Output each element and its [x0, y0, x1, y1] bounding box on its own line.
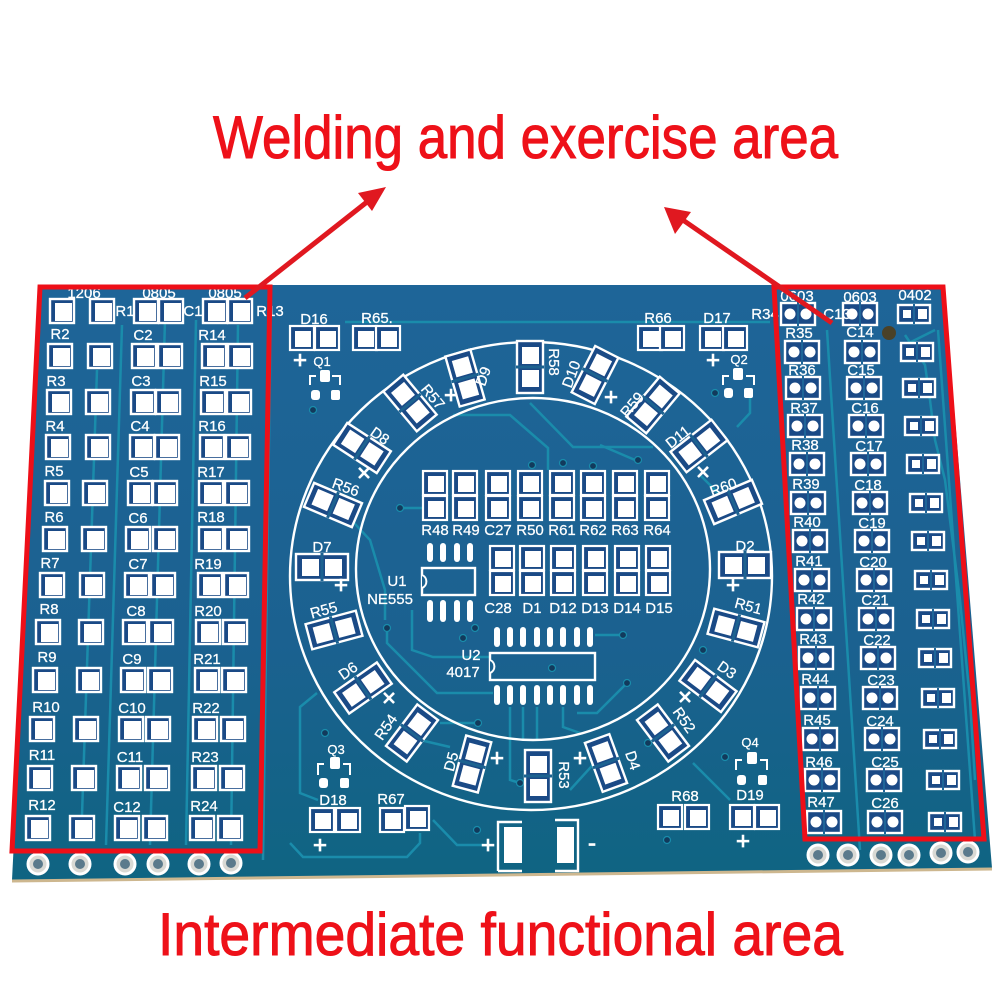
- battery pads: -: [588, 830, 596, 857]
- ring component labels: +: [573, 745, 587, 772]
- chip U1 NE555: U1: [387, 573, 407, 590]
- left practice labels: C6: [128, 510, 148, 527]
- lower capacitor and diode grid: D15: [645, 600, 673, 617]
- left practice labels: R10: [32, 699, 60, 716]
- right practice labels: R38: [791, 437, 819, 454]
- ring component labels: +: [490, 745, 504, 772]
- mounting hole: [882, 326, 896, 340]
- ring circles: [290, 342, 772, 810]
- corner components bottom: [310, 735, 779, 859]
- ring component labels: +: [604, 384, 618, 411]
- right practice labels: C15: [847, 362, 875, 379]
- left practice labels: 0805: [208, 285, 242, 302]
- left practice labels: R12: [28, 797, 56, 814]
- left practice labels: R11: [29, 747, 55, 764]
- left practice labels: R23: [191, 749, 219, 766]
- ring component labels: R51: [733, 595, 764, 618]
- ring component labels: R60: [708, 475, 739, 500]
- right practice labels: R45: [803, 712, 831, 729]
- right practice labels: R43: [799, 631, 827, 648]
- left practice labels: R6: [44, 509, 64, 526]
- caption: intermediate functional area: Intermediate functional area: [158, 901, 844, 968]
- right practice labels: 0603: [780, 288, 814, 305]
- left practice labels: C10: [118, 700, 146, 717]
- top resistor grid: R48: [421, 522, 449, 539]
- left practice labels: R20: [194, 603, 222, 620]
- copper traces: [82, 300, 975, 860]
- left practice labels: C9: [122, 651, 142, 668]
- ring component labels: R52: [669, 704, 699, 737]
- ring component labels: R53: [555, 761, 572, 789]
- top resistor grid: R49: [452, 522, 480, 539]
- ring component labels: D11: [663, 423, 694, 452]
- ring components: [296, 341, 771, 802]
- ring component labels: D7: [312, 539, 332, 556]
- left practice labels: C3: [131, 373, 151, 390]
- ring component labels: R59: [617, 389, 648, 421]
- lower capacitor and diode grid: D12: [549, 600, 577, 617]
- top resistor grid: R61: [548, 522, 576, 539]
- ring component labels: R57: [417, 381, 448, 413]
- corner components bottom: Q4: [741, 735, 759, 750]
- left practice labels: R17: [197, 464, 225, 481]
- left practice labels: R8: [39, 601, 59, 618]
- left practice labels: R19: [194, 556, 222, 573]
- right practice labels: C25: [871, 754, 899, 771]
- right practice labels: R39: [792, 476, 820, 493]
- right practice labels: R42: [797, 591, 825, 608]
- corner components top: Q2: [730, 352, 748, 367]
- lower capacitor and diode grid: [484, 546, 673, 617]
- battery pads: +: [481, 832, 495, 859]
- left practice labels: R16: [198, 418, 226, 435]
- ring component labels: +: [444, 382, 458, 409]
- left practice labels: R1: [115, 303, 135, 320]
- left practice labels: R14: [198, 327, 226, 344]
- left practice labels: C11: [117, 749, 143, 766]
- corner components bottom: Q3: [327, 742, 345, 757]
- ring component labels: R58: [545, 348, 562, 376]
- right practice labels: [751, 287, 932, 812]
- corner components top: Q1: [313, 354, 331, 369]
- left practice labels: R13: [256, 303, 284, 320]
- left practice labels: R21: [193, 651, 221, 668]
- right practice labels: C24: [866, 713, 894, 730]
- corner components top: [290, 310, 754, 400]
- ring component labels: +: [726, 572, 740, 599]
- left practice labels: R2: [50, 326, 70, 343]
- right practice pads: [781, 302, 961, 834]
- right practice labels: C13: [823, 306, 851, 323]
- right practice labels: R46: [805, 754, 833, 771]
- corner components top: R65.: [361, 310, 393, 327]
- right practice labels: R37: [790, 400, 818, 417]
- arrow: right box to title: [664, 207, 832, 323]
- ring component labels: D3: [714, 658, 739, 683]
- right practice labels: 0603: [843, 289, 877, 306]
- chip U2 4017: U2: [461, 647, 481, 664]
- corner components bottom: R67: [377, 791, 405, 808]
- left practice labels: C1: [183, 303, 203, 320]
- corner components top: +: [706, 347, 720, 374]
- ring component labels: ×: [696, 459, 710, 486]
- right practice labels: C14: [846, 324, 874, 341]
- ring component labels: R56: [330, 475, 361, 500]
- corner components top: R66: [644, 310, 672, 327]
- left practice labels: R5: [44, 463, 64, 480]
- ring component labels: D5: [441, 750, 462, 773]
- left practice labels: C2: [133, 327, 153, 344]
- ring component labels: [308, 348, 764, 789]
- left practice pads: [26, 299, 252, 840]
- left practice labels: R18: [197, 509, 225, 526]
- ring component labels: D8: [367, 424, 392, 449]
- right practice labels: C23: [867, 672, 895, 689]
- right practice labels: C17: [855, 438, 883, 455]
- left practice labels: 1206: [67, 285, 101, 302]
- right practice labels: R34: [751, 306, 779, 323]
- arrow: left box to title: [245, 187, 386, 298]
- top resistor grid: R50: [516, 522, 544, 539]
- ring component labels: ×: [678, 684, 692, 711]
- top resistor grid: C27: [484, 522, 512, 539]
- ring component labels: D10: [559, 359, 584, 390]
- right practice labels: C18: [854, 477, 882, 494]
- vias: [310, 390, 728, 844]
- right practice labels: R44: [801, 671, 829, 688]
- chip U2 4017: 4017: [446, 664, 480, 681]
- left practice labels: [28, 285, 284, 816]
- red box: left practice area: [12, 287, 270, 851]
- corner components top: D16: [300, 311, 328, 328]
- chip U1 NE555: [367, 543, 475, 622]
- right practice labels: C19: [858, 515, 886, 532]
- left practice labels: C4: [130, 418, 150, 435]
- ring component labels: R55: [308, 599, 339, 622]
- lower capacitor and diode grid: D13: [581, 600, 609, 617]
- left practice labels: C5: [129, 464, 149, 481]
- left practice labels: R22: [192, 700, 220, 717]
- corner components bottom: R68: [671, 788, 699, 805]
- through holes: [28, 842, 978, 874]
- ring component labels: D6: [336, 659, 361, 684]
- left practice labels: C7: [128, 556, 148, 573]
- ring component labels: ×: [357, 460, 371, 487]
- lower capacitor and diode grid: D1: [522, 600, 542, 617]
- left practice labels: C8: [126, 603, 146, 620]
- title: welding and exercise area: Welding and exercise area: [213, 104, 839, 171]
- corner components top: +: [293, 347, 307, 374]
- right practice labels: R40: [793, 514, 821, 531]
- left practice labels: C12: [113, 799, 141, 816]
- PCB board: [12, 285, 992, 881]
- left practice labels: R24: [190, 798, 218, 815]
- corner components top: D17: [703, 310, 731, 327]
- top resistor grid: R64: [643, 522, 671, 539]
- red box: right practice area: [774, 287, 984, 839]
- chip U1 NE555: NE555: [367, 591, 413, 608]
- ring component labels: D4: [621, 749, 643, 772]
- right practice labels: C16: [851, 400, 879, 417]
- top resistor grid: R63: [611, 522, 639, 539]
- right practice labels: R47: [807, 794, 835, 811]
- top resistor grid: [421, 471, 671, 539]
- ring component labels: R54: [371, 711, 401, 744]
- ring component labels: D9: [473, 365, 495, 388]
- ring component labels: ×: [382, 685, 396, 712]
- left practice labels: R3: [46, 373, 66, 390]
- battery pads: [481, 820, 596, 871]
- corner components bottom: +: [736, 828, 750, 855]
- corner components bottom: D18: [319, 792, 347, 809]
- right practice labels: R41: [795, 553, 823, 570]
- left practice labels: R4: [45, 418, 65, 435]
- ring component labels: +: [334, 572, 348, 599]
- right practice labels: 0402: [898, 287, 932, 304]
- lower capacitor and diode grid: C28: [484, 600, 512, 617]
- top resistor grid: R62: [579, 522, 607, 539]
- corner components bottom: D19: [736, 787, 764, 804]
- left practice labels: R15: [199, 373, 227, 390]
- right practice labels: R36: [788, 362, 816, 379]
- right practice labels: C20: [859, 554, 887, 571]
- right practice labels: C21: [861, 592, 889, 609]
- ring component labels: D2: [735, 538, 755, 555]
- left practice labels: R9: [37, 649, 57, 666]
- right practice labels: C22: [863, 632, 891, 649]
- right practice labels: C26: [871, 795, 899, 812]
- lower capacitor and diode grid: D14: [613, 600, 641, 617]
- left practice labels: 0805: [142, 285, 176, 302]
- chip U2 4017: [446, 627, 595, 705]
- corner components bottom: +: [313, 832, 327, 859]
- left practice labels: R7: [40, 555, 60, 572]
- right practice labels: R35: [785, 325, 813, 342]
